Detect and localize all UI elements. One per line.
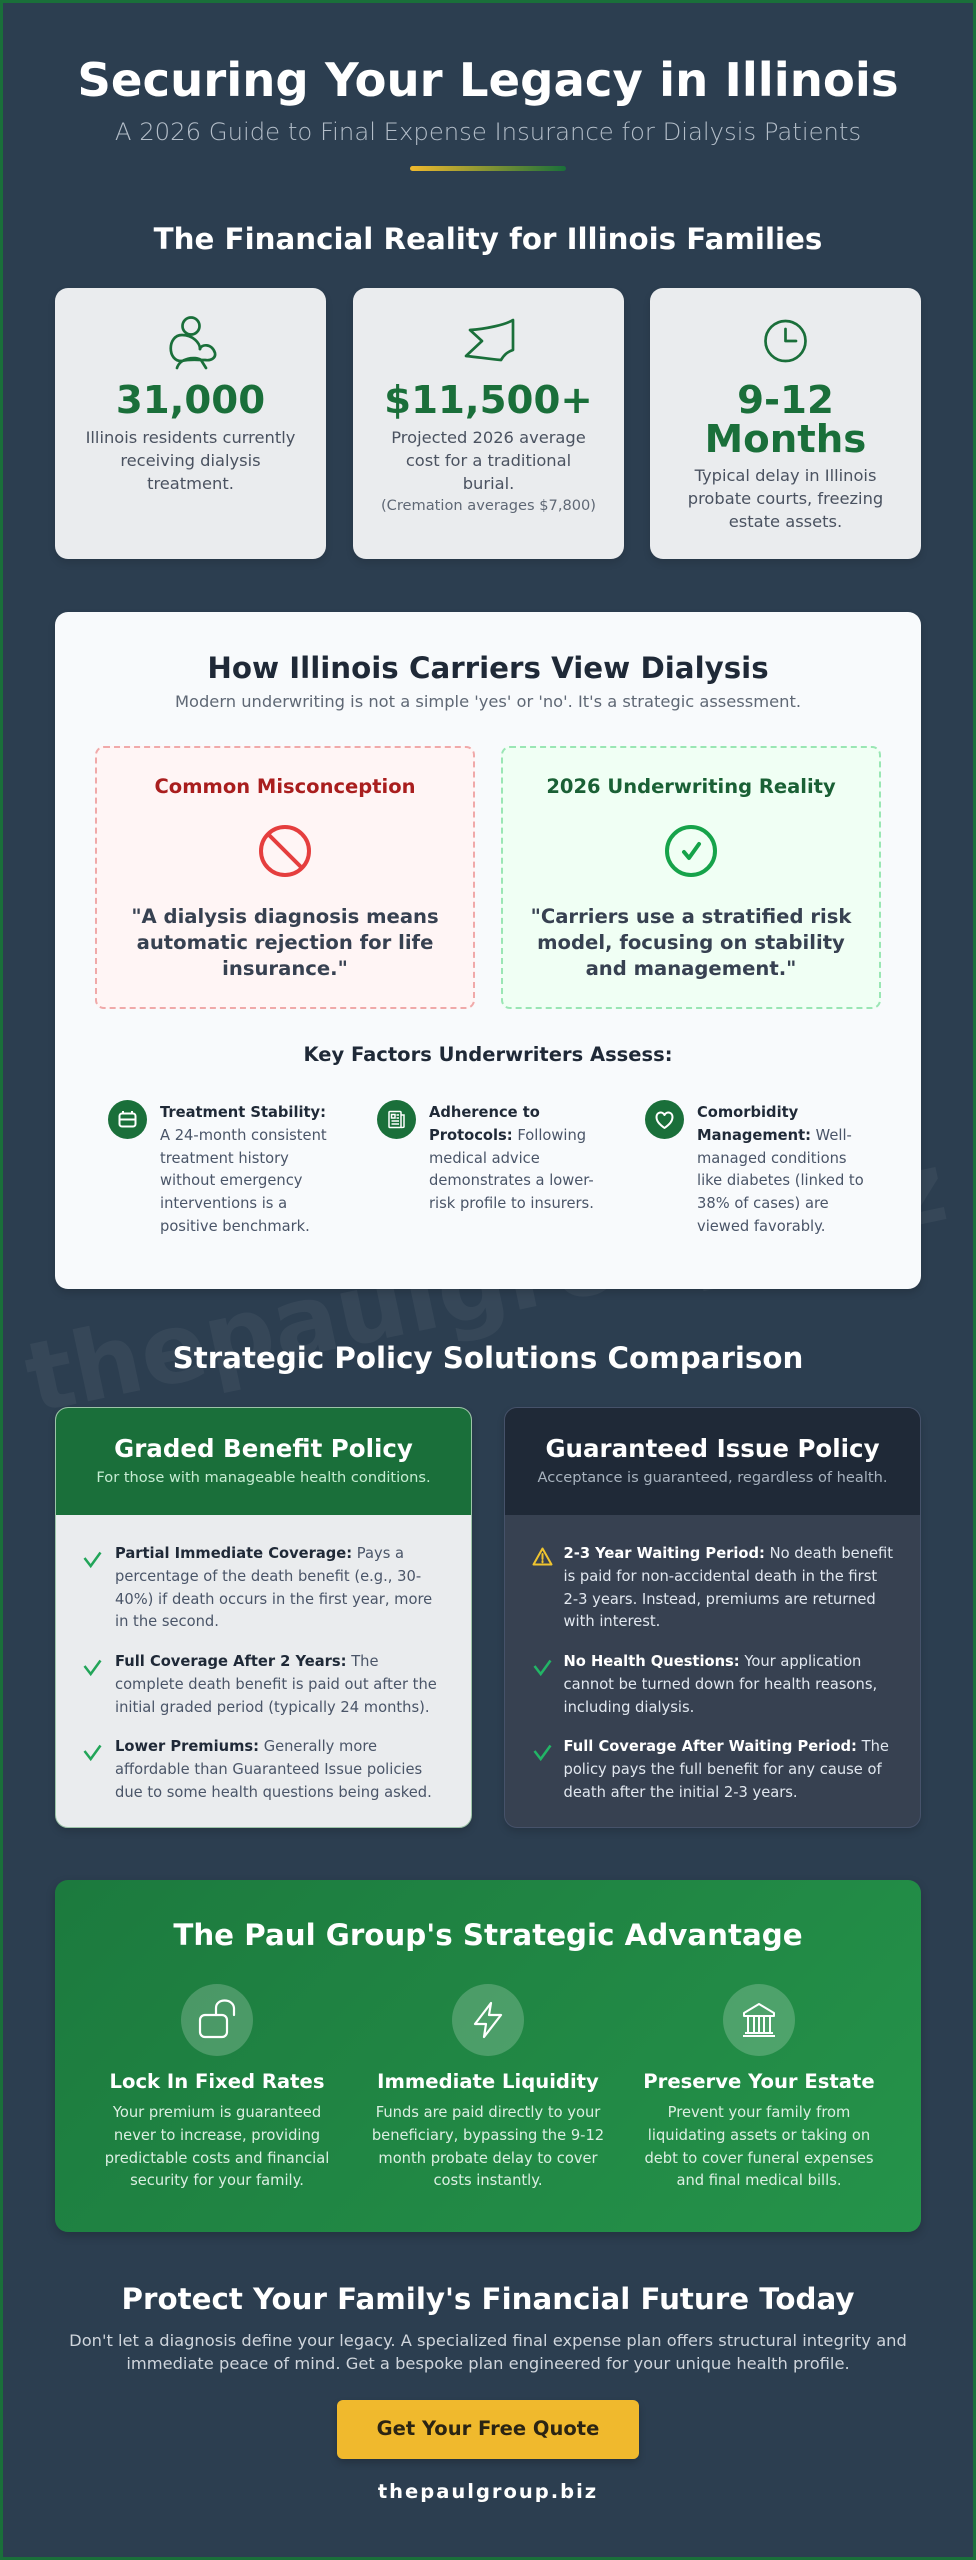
misconception quote: insurance." — [222, 957, 348, 980]
stat description: treatment. — [147, 474, 234, 493]
reality box — [501, 746, 881, 1009]
benefit text: 40%) if death occurs in the first year, more — [115, 1591, 432, 1608]
stat number: Months — [705, 417, 866, 462]
benefit text — [115, 1738, 432, 1801]
advantage: estate — [597, 1984, 921, 2214]
factor text: viewed favorably. — [697, 1218, 825, 1235]
factor text: 38% of cases) are — [697, 1195, 829, 1212]
factor text: Adherence to — [429, 1104, 540, 1121]
advantage title: Preserve Your Estate — [643, 2070, 875, 2093]
heading: financial reality: The Financial Reality for Illinois Families — [154, 222, 822, 256]
stat card: probate delay — [650, 288, 921, 559]
point text: Full Coverage After Waiting Period: The — [564, 1738, 889, 1755]
benefit: full coverage — [84, 1653, 437, 1716]
benefit: partial immediate coverage — [84, 1545, 432, 1630]
advantage text — [326, 2102, 650, 2193]
factor text — [697, 1104, 864, 1235]
point text — [564, 1653, 877, 1716]
guaranteed header — [505, 1408, 920, 1515]
advantage: fixed rates — [105, 1984, 329, 2189]
benefit text: complete death benefit is paid out after the — [115, 1676, 437, 1693]
point text: with interest. — [564, 1613, 660, 1630]
factor text: Comorbidity — [697, 1104, 798, 1121]
factor: treatment stability — [108, 1100, 327, 1235]
graded header — [56, 1408, 471, 1515]
call to action text — [0, 2330, 976, 2376]
icon: check circle — [665, 825, 717, 877]
point text: 2-3 years. Instead, premiums are returned — [564, 1591, 876, 1608]
reality heading: 2026 Underwriting Reality — [546, 775, 836, 798]
factor text: A 24-month consistent — [160, 1127, 327, 1144]
guaranteed title: Guaranteed Issue Policy — [545, 1434, 880, 1463]
advantage text: Prevent your family from — [668, 2104, 850, 2121]
point text: including dialysis. — [564, 1699, 694, 1716]
point text — [564, 1545, 893, 1630]
factor text: Treatment Stability: — [160, 1104, 326, 1121]
key factors heading: Key Factors Underwriters Assess: — [303, 1043, 673, 1066]
icon: calendar — [108, 1100, 147, 1139]
point: no health questions — [534, 1653, 877, 1716]
icon: lightning — [452, 1984, 524, 2056]
button: free quote — [337, 2400, 639, 2459]
stat card: burial cost — [353, 288, 624, 559]
icon: check — [84, 1660, 102, 1676]
benefit text: in the second. — [115, 1613, 219, 1630]
advantage text: beneficiary, bypassing the 9-12 — [372, 2127, 604, 2144]
stat description: Illinois residents currently — [86, 428, 295, 447]
advantage text: month probate delay to cover — [378, 2150, 598, 2167]
factor: adherence — [377, 1100, 594, 1212]
factor text — [160, 1104, 327, 1235]
panel heading: How Illinois Carriers View Dialysis — [207, 651, 769, 685]
icon: open lock — [181, 1984, 253, 2056]
advantage text: security for your family. — [130, 2172, 304, 2189]
panel: guaranteed issue policy — [504, 1407, 921, 1828]
heading: call to action: Protect Your Family's Financial Future Today — [122, 2282, 854, 2316]
advantage text: and final medical bills. — [676, 2172, 842, 2189]
advantage text: never to increase, providing — [114, 2127, 320, 2144]
stat description: Projected 2026 average — [391, 428, 586, 447]
advantage title: Lock In Fixed Rates — [110, 2070, 324, 2093]
misconception quote: "A dialysis diagnosis means — [131, 905, 439, 928]
button: free quote: Get Your Free Quote — [377, 2417, 599, 2440]
stat description — [391, 428, 586, 493]
icon: check — [84, 1552, 102, 1568]
advantage text — [597, 2102, 921, 2193]
advantage text: predictable costs and financial — [105, 2150, 329, 2167]
icon: check — [84, 1744, 102, 1762]
icon: check — [534, 1744, 552, 1761]
benefit text: initial graded period (typically 24 months). — [115, 1699, 430, 1716]
stat description: estate assets. — [729, 512, 842, 531]
accent bar — [410, 166, 566, 171]
factor text: risk profile to insurers. — [429, 1195, 594, 1212]
factor text — [429, 1104, 594, 1212]
benefit text — [115, 1545, 432, 1630]
point text: cannot be turned down for health reasons, — [564, 1676, 877, 1693]
subtitle: A 2026 Guide to Final Expense Insurance for Dialysis Patients — [115, 117, 861, 146]
stat description: probate courts, freezing — [688, 489, 883, 508]
advantage text: Your premium is guaranteed — [113, 2104, 321, 2121]
factor: comorbidity — [645, 1100, 864, 1235]
stat description: Typical delay in Illinois — [695, 466, 876, 485]
advantage heading: The Paul Group's Strategic Advantage — [173, 1918, 803, 1952]
icon: map outline — [464, 318, 514, 362]
icon: document — [377, 1100, 416, 1139]
icon: prohibited — [259, 825, 311, 877]
benefit text: due to some health questions being asked. — [115, 1784, 432, 1801]
misconception heading: Common Misconception — [154, 775, 415, 798]
benefit text — [115, 1653, 437, 1716]
benefit text: percentage of the death benefit (e.g., 30- — [115, 1568, 421, 1585]
watermark: thepaulgroup.biz — [16, 1130, 956, 1435]
factor text: medical advice — [429, 1150, 540, 1167]
advantage text: Funds are paid directly to your — [376, 2104, 600, 2121]
benefit text: Lower Premiums: Generally more — [115, 1738, 377, 1755]
point: full coverage — [534, 1738, 889, 1801]
factor text: treatment history — [160, 1150, 289, 1167]
stat number: $11,500+ — [384, 378, 593, 423]
heading: policy comparison: Strategic Policy Solutions Comparison — [173, 1341, 803, 1375]
icon: check — [534, 1660, 552, 1676]
cremation note: (Cremation averages $7,800) — [381, 497, 596, 514]
point text — [564, 1738, 889, 1801]
icon: clock — [764, 320, 807, 362]
factor text: interventions is a — [160, 1195, 287, 1212]
benefit text: affordable than Guaranteed Issue policies — [115, 1761, 422, 1778]
point: waiting period — [532, 1545, 893, 1630]
icon: warning — [532, 1548, 552, 1566]
stat card: residents — [55, 288, 326, 559]
advantage text: liquidating assets or taking on — [648, 2127, 870, 2144]
graded subtitle: For those with manageable health conditions. — [96, 1469, 431, 1486]
icon: person with dialysis — [169, 316, 216, 370]
point text: death after the initial 2-3 years. — [564, 1784, 798, 1801]
factor text: demonstrates a lower- — [429, 1172, 594, 1189]
call to action text: Don't let a diagnosis define your legacy. A specialized final expense plan offers structural integrity and — [69, 2331, 907, 2350]
icon: bank building — [723, 1984, 795, 2056]
guaranteed subtitle: Acceptance is guaranteed, regardless of health. — [537, 1469, 888, 1486]
benefit text: Partial Immediate Coverage: Pays a — [115, 1545, 404, 1562]
factor text: positive benchmark. — [160, 1218, 310, 1235]
stat description — [688, 466, 883, 531]
stat number — [705, 378, 866, 462]
icon: heart — [645, 1100, 684, 1139]
factor text: like diabetes (linked to — [697, 1172, 864, 1189]
stat number: 9-12 — [737, 378, 834, 423]
misconception quote: automatic rejection for life — [137, 931, 433, 954]
advantage text: debt to cover funeral expenses — [644, 2150, 874, 2167]
point text: policy pays the full benefit for any cause of — [564, 1761, 882, 1778]
reality quote: model, focusing on stability — [537, 931, 845, 954]
panel: graded benefit policy — [55, 1407, 472, 1828]
call to action text: immediate peace of mind. Get a bespoke plan engineered for your unique health profile. — [126, 2354, 850, 2373]
stat number: 31,000 — [116, 378, 265, 423]
panel subheading: Modern underwriting is not a simple 'yes' or 'no'. It's a strategic assessment. — [175, 692, 801, 711]
panel: strategic advantage — [55, 1880, 921, 2232]
factor text: Management: Well- — [697, 1127, 852, 1144]
point text: No Health Questions: Your application — [564, 1653, 861, 1670]
advantage: liquidity — [326, 1984, 650, 2214]
misconception box — [95, 746, 475, 1009]
misconception quote — [131, 905, 439, 980]
reality quote — [531, 905, 852, 980]
advantage text — [55, 2102, 379, 2193]
factor text: Protocols: Following — [429, 1127, 586, 1144]
factor text: without emergency — [160, 1172, 302, 1189]
factor text: managed conditions — [697, 1150, 847, 1167]
advantage text: costs instantly. — [433, 2172, 542, 2189]
website: thepaulgroup.biz — [378, 2480, 598, 2503]
title: Securing Your Legacy in Illinois — [77, 53, 899, 107]
stat description — [86, 428, 295, 493]
panel: how carriers view dialysis — [55, 612, 921, 1289]
reality quote: "Carriers use a stratified risk — [531, 905, 851, 928]
reality quote: and management." — [586, 957, 796, 980]
advantage title: Immediate Liquidity — [377, 2070, 599, 2093]
point text: is paid for non-accidental death in the first — [564, 1568, 877, 1585]
benefit text: Full Coverage After 2 Years: The — [115, 1653, 379, 1670]
point text: 2-3 Year Waiting Period: No death benefit — [564, 1545, 893, 1562]
benefit: lower premiums — [84, 1738, 432, 1801]
graded title: Graded Benefit Policy — [114, 1434, 413, 1463]
stat description: receiving dialysis — [120, 451, 261, 470]
stat description: burial. — [463, 474, 514, 493]
stat description: cost for a traditional — [406, 451, 571, 470]
